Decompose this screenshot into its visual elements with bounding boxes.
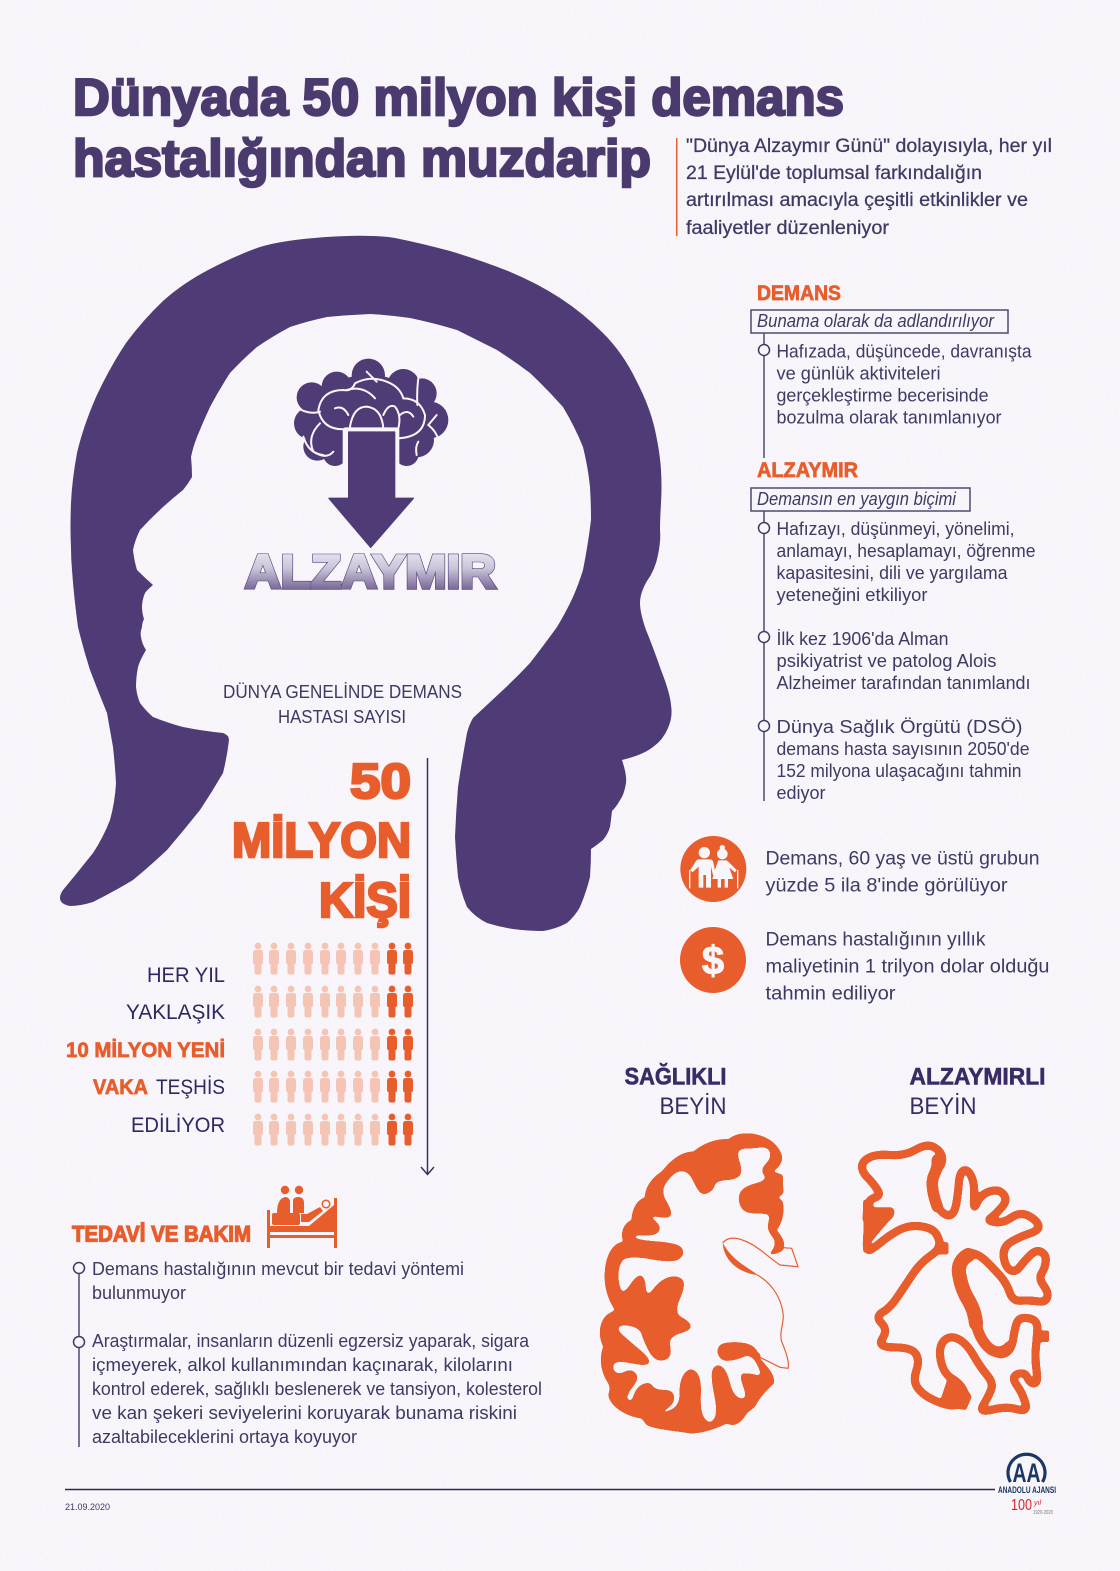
world patient label: HASTASI SAYISI bbox=[278, 707, 406, 727]
new cases text: 10 MİLYON YENİ bbox=[66, 1039, 225, 1062]
arrow: vertical down bbox=[421, 758, 434, 1174]
panel: treatment list: ve kan şekeri seviyelerini koruyarak bunama riskini bbox=[92, 1403, 517, 1423]
panel: treatment list: içmeyerek, alkol kullanımından kaçınarak, kilolarını bbox=[92, 1355, 513, 1375]
panel: treatment list: azaltabileceklerini ortaya koyuyor bbox=[92, 1427, 357, 1447]
logo: anadolu ajansı: 1920-2020 bbox=[1033, 1510, 1053, 1516]
intro text block: "Dünya Alzaymır Günü" dolayısıyla, her yıl bbox=[686, 136, 1052, 157]
panel: alzaymır definition: ediyor bbox=[776, 783, 826, 803]
panel: alzaymır definition: psikiyatrist ve patolog Alois bbox=[776, 651, 996, 671]
logo: anadolu ajansı: 100 bbox=[1011, 1497, 1032, 1514]
age note bbox=[766, 848, 1040, 896]
panel: alzaymır definition: 152 milyona ulaşacağını tahmin bbox=[776, 761, 1022, 781]
cost note: maliyetinin 1 trilyon dolar olduğu bbox=[766, 956, 1050, 978]
panel: demans definition: ve günlük aktiviteleri bbox=[776, 364, 940, 384]
panel: treatment list bbox=[74, 1259, 542, 1447]
panel: demans definition: Hafızada, düşüncede, davranışta bbox=[776, 342, 1032, 362]
panel: alzaymır definition: Dünya Sağlık Örgütü (DSÖ) bbox=[776, 717, 1022, 737]
new cases text: YAKLAŞIK bbox=[126, 1001, 225, 1024]
panel: alzaymır definition: kapasitesini, dili ve yargılama bbox=[776, 563, 1008, 583]
illustration: alzheimer brain bbox=[862, 1146, 1049, 1411]
panel: treatment list: Araştırmalar, insanların düzenli egzersiz yaparak, sigara bbox=[92, 1331, 530, 1351]
panel: alzaymır definition: yeteneğini etkiliyor bbox=[776, 585, 928, 605]
big number: 50 milyon kişi: MİLYON bbox=[232, 814, 411, 868]
age note: Demans, 60 yaş ve üstü grubun bbox=[766, 848, 1040, 870]
footer rule bbox=[65, 1488, 995, 1490]
world patient label bbox=[223, 682, 462, 727]
panel: demans definition: bozulma olarak tanımlanıyor bbox=[776, 408, 1002, 428]
panel: treatment list: bulunmuyor bbox=[92, 1283, 186, 1303]
icon: dollar: $ bbox=[702, 939, 724, 983]
panel: treatment list: Demans hastalığının mevcut bir tedavi yöntemi bbox=[92, 1259, 464, 1279]
logo: anadolu ajansı bbox=[998, 1454, 1056, 1516]
heading: alzheimer brain: BEYİN bbox=[910, 1093, 976, 1120]
panel: alzaymır definition: ALZAYMIR bbox=[757, 459, 858, 482]
intro text block: faaliyetler düzenleniyor bbox=[686, 218, 890, 239]
date: 21.09.2020 bbox=[65, 1502, 110, 1513]
logo: anadolu ajansı: ANADOLU AJANSI bbox=[998, 1485, 1056, 1495]
new cases text: VAKA bbox=[93, 1076, 148, 1099]
panel: alzaymır definition: demans hasta sayısının 2050'de bbox=[776, 739, 1030, 759]
ALZAYMIR gradient wordmark: ALZAYMIR bbox=[245, 545, 496, 598]
panel: demans definition: Bunama olarak da adlandırılıyor bbox=[757, 311, 995, 331]
new cases text: EDİLİYOR bbox=[131, 1114, 225, 1137]
panel: alzaymır definition: Alzheimer tarafından tanımlandı bbox=[776, 673, 1030, 693]
cost note bbox=[766, 930, 1050, 1004]
intro text block bbox=[676, 136, 1052, 239]
panel: demans definition bbox=[751, 282, 1032, 458]
age note: yüzde 5 ila 8'inde görülüyor bbox=[766, 876, 1008, 896]
heading: alzheimer brain bbox=[910, 1064, 1046, 1120]
panel: alzaymır definition bbox=[751, 459, 1036, 803]
pictogram: people rows bbox=[253, 943, 413, 1146]
icon: patient bed bbox=[267, 1186, 337, 1248]
big number: 50 milyon kişi bbox=[232, 755, 411, 928]
new cases text: HER YIL bbox=[147, 964, 225, 987]
panel: alzaymır definition: Hafızayı, düşünmeyi, yönelimi, bbox=[776, 519, 1014, 539]
big number: 50 milyon kişi: 50 bbox=[350, 755, 411, 809]
icon: brain with down arrow bbox=[294, 359, 448, 547]
cost note: Demans hastalığının yıllık bbox=[766, 930, 986, 950]
new cases text: TEŞHİS bbox=[156, 1076, 225, 1099]
world patient label: DÜNYA GENELİNDE DEMANS bbox=[223, 682, 462, 702]
panel: alzaymır definition: Demansın en yaygın biçimi bbox=[757, 489, 957, 509]
logo: anadolu ajansı: yıl bbox=[1033, 1500, 1041, 1507]
intro text block: 21 Eylül'de toplumsal farkındalığın bbox=[686, 163, 982, 184]
big number: 50 milyon kişi: KİŞİ bbox=[319, 874, 411, 928]
panel: demans definition: gerçekleştirme becerisinde bbox=[776, 386, 988, 406]
head silhouette bbox=[60, 236, 672, 931]
icon: elderly couple bbox=[680, 836, 746, 902]
heading: healthy brain: SAĞLIKLI bbox=[624, 1062, 726, 1090]
heading: healthy brain bbox=[624, 1062, 726, 1120]
new cases text bbox=[66, 964, 225, 1137]
heading: healthy brain: BEYİN bbox=[660, 1093, 726, 1120]
heading: alzheimer brain: ALZAYMIRLI bbox=[910, 1064, 1046, 1090]
title: hastalığından muzdarip bbox=[73, 130, 651, 188]
logo: anadolu ajansı: AA bbox=[1012, 1458, 1040, 1488]
ALZAYMIR gradient wordmark: ALZAYMIR bbox=[245, 545, 496, 598]
panel: alzaymır definition: İlk kez 1906'da Alman bbox=[776, 629, 948, 649]
heading: tedavi ve bakım: TEDAVİ VE BAKIM bbox=[72, 1222, 251, 1246]
panel: alzaymır definition: anlamayı, hesaplamayı, öğrenme bbox=[776, 541, 1036, 561]
icon: dollar bbox=[680, 927, 746, 993]
panel: demans definition: DEMANS bbox=[757, 282, 841, 305]
title bbox=[73, 69, 844, 188]
title: Dünyada 50 milyon kişi demans bbox=[73, 69, 844, 127]
intro text block: artırılması amacıyla çeşitli etkinlikler ve bbox=[686, 190, 1028, 211]
illustration: healthy brain bbox=[600, 1133, 798, 1433]
cost note: tahmin ediliyor bbox=[766, 984, 896, 1004]
panel: treatment list: kontrol ederek, sağlıklı beslenerek ve tansiyon, kolesterol bbox=[92, 1379, 542, 1399]
